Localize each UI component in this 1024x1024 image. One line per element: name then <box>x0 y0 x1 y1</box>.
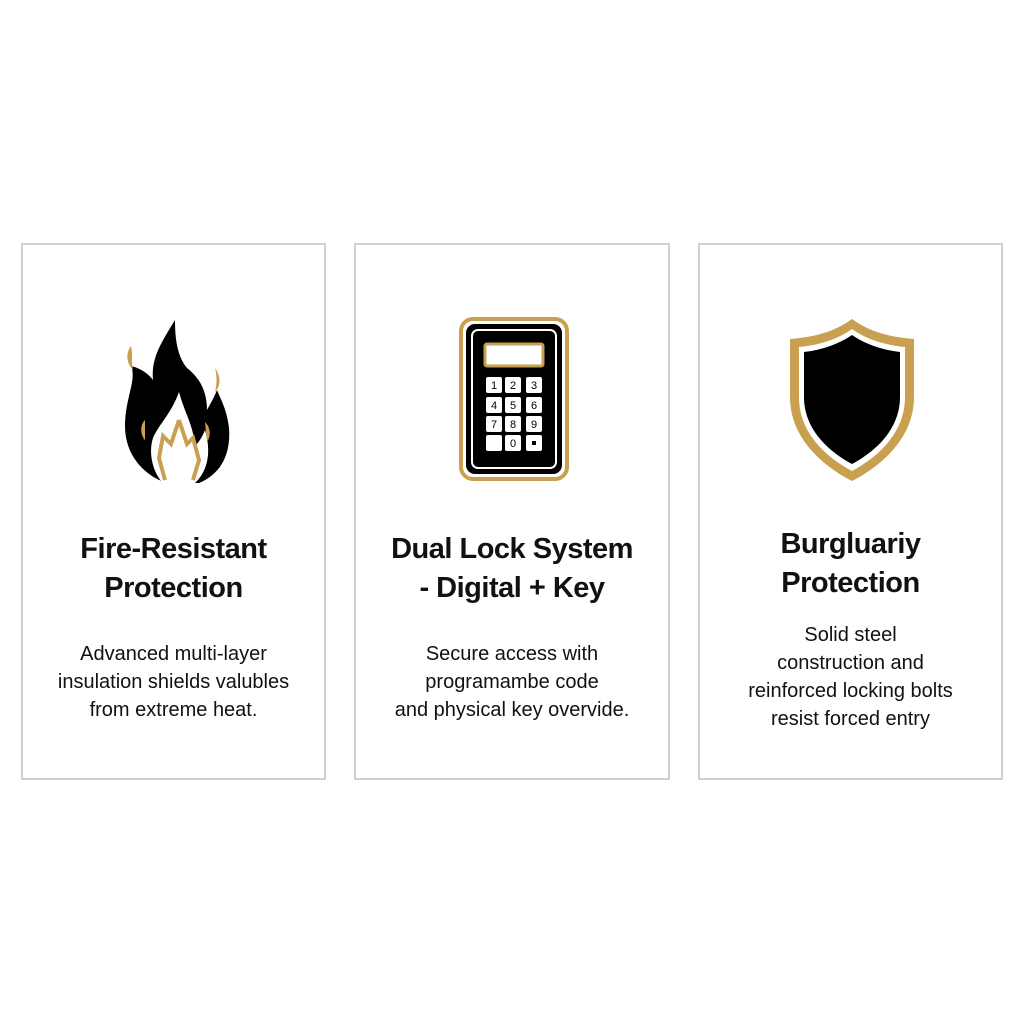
text block <box>748 624 953 730</box>
heading: Protection <box>104 572 243 604</box>
icon: keypad: 4 <box>491 400 497 412</box>
heading <box>391 533 633 604</box>
heading <box>80 533 267 604</box>
text block <box>395 643 629 721</box>
heading: Fire-Resistant <box>80 533 267 565</box>
icon: keypad: 3 <box>531 380 537 392</box>
text block: Solid steel <box>804 624 897 646</box>
panel: burglary <box>698 243 1003 780</box>
icon: keypad: 0 <box>510 438 516 450</box>
heading: - Digital + Key <box>419 572 605 604</box>
text block <box>58 643 289 721</box>
icon: keypad: 7 <box>491 419 497 431</box>
heading: Burgluariy <box>780 528 921 560</box>
heading: Dual Lock System <box>391 533 633 565</box>
icon: keypad: 5 <box>510 400 516 412</box>
icon: keypad: 2 <box>510 380 516 392</box>
text block: from extreme heat. <box>90 699 257 721</box>
icon: keypad: 6 <box>531 400 537 412</box>
panel: fire-resistant <box>21 243 326 780</box>
text block: construction and <box>777 652 924 674</box>
text block: Advanced multi-layer <box>80 643 267 665</box>
icon: keypad: 9 <box>531 419 537 431</box>
icon: keypad: 8 <box>510 419 516 431</box>
text block: programambe code <box>425 671 599 693</box>
icon: flame <box>125 320 230 483</box>
text block: reinforced locking bolts <box>748 680 953 702</box>
text block: insulation shields valubles <box>58 671 289 693</box>
icon: keypad <box>459 317 569 481</box>
text block: resist forced entry <box>771 708 930 730</box>
icon: shield <box>790 319 914 481</box>
text block: and physical key overvide. <box>395 699 629 721</box>
heading <box>780 528 921 599</box>
heading: Protection <box>781 567 920 599</box>
icon: keypad: 1 <box>491 380 497 392</box>
panel: dual lock <box>354 243 670 780</box>
text block: Secure access with <box>426 643 598 665</box>
